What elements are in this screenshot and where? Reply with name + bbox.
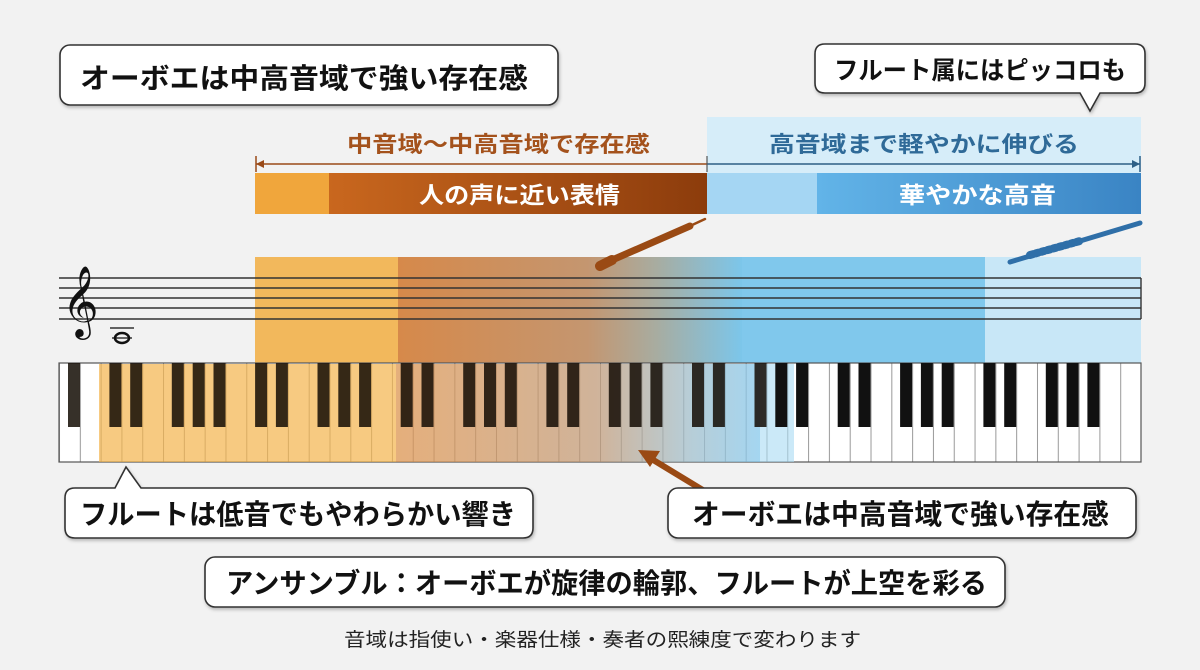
callout: oboe mid-high: [668, 488, 1136, 538]
arrow: oboe pointer: [638, 450, 706, 492]
callout: flute low: [65, 467, 533, 538]
arrow: range bracket: [256, 156, 1140, 172]
callout: flute low: フルートは低音でもやわらかい響き: [80, 499, 516, 530]
callout: oboe mid-high: オーボエは中高音域で強い存在感: [692, 499, 1109, 530]
panel: staff range highlight: [255, 257, 1141, 363]
callout: title: [60, 45, 558, 105]
bar: flute character: 華やかな高音: [899, 182, 1056, 208]
label: flute range: 高音域まで軽やかに伸びる: [769, 132, 1079, 157]
bar: oboe character: 人の声に近い表情: [419, 182, 620, 208]
callout: piccolo: フルート属にはピッコロも: [834, 57, 1126, 85]
callout: piccolo: [815, 44, 1145, 111]
callout: title: オーボエは中高音域で強い存在感: [80, 63, 528, 94]
piano keyboard: [59, 363, 1141, 462]
label: oboe range: 中音域〜中高音域で存在感: [347, 132, 650, 157]
callout: ensemble: [205, 557, 1005, 607]
callout: ensemble: アンサンブル：オーボエが旋律の輪郭、フルートが上空を彩る: [226, 567, 987, 599]
bar: flute character: [707, 173, 1141, 214]
icon: whole note: [110, 328, 134, 343]
panel: flute range background: [707, 117, 1141, 213]
icon: oboe: [600, 219, 705, 266]
bar: oboe character: [255, 173, 707, 214]
icon: flute: [1010, 223, 1140, 262]
staff: [59, 278, 1141, 319]
footer note: 音域は指使い・楽器仕様・奏者の熙練度で変わります: [344, 629, 861, 651]
icon: treble clef: 𝄞: [62, 264, 99, 340]
